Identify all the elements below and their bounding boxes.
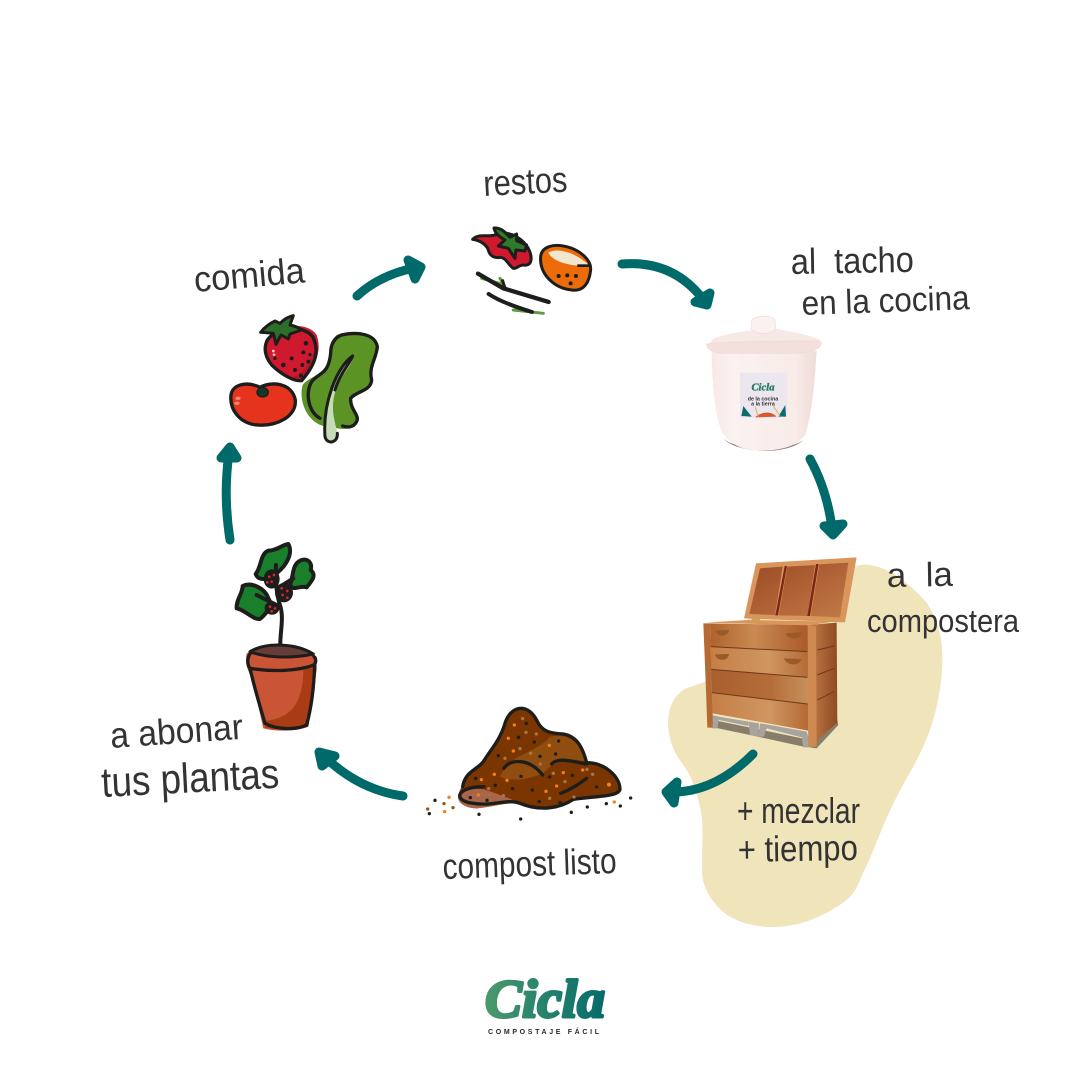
strawberry [261, 316, 319, 382]
arrow: compost to maceta [319, 752, 403, 796]
bin label: a la tierra [751, 401, 775, 407]
icon: restos (scraps) [473, 228, 591, 313]
pot [246, 645, 317, 731]
icon: comida (strawberry, tomato, leaf) [231, 316, 377, 442]
vegetable stalks [478, 274, 549, 313]
label: a abonar: a abonar [109, 706, 244, 756]
arrow: tacho to compostera [810, 459, 843, 535]
tomato [231, 384, 295, 425]
logo: Cicla: COMPOSTAJE FÁCIL [488, 1027, 600, 1036]
icon: wooden compost bin [703, 557, 857, 748]
label: restos: restos [482, 159, 568, 204]
arrow: maceta to comida [221, 447, 237, 540]
arrow: compostera to compost [666, 754, 753, 803]
arrow: restos to tacho [622, 264, 710, 305]
logo: Cicla: Cicla [485, 969, 605, 1029]
bin body [703, 618, 838, 748]
label: tiempo: + tiempo [737, 827, 858, 870]
icon: potted plant [237, 544, 317, 731]
plant [237, 544, 314, 654]
label: a la: a la [886, 556, 953, 595]
label: compost listo: compost listo [442, 840, 617, 887]
background blob behind compost bin [668, 565, 942, 927]
arrow: comida to restos [357, 260, 421, 296]
bin label: de la cocina [748, 397, 778, 403]
label: mezclar: + mezclar [737, 790, 860, 831]
label: al tacho: al tacho [790, 239, 914, 282]
label: en la cocina: en la cocina [801, 279, 970, 323]
bin label [740, 373, 787, 418]
strawberry scrap [473, 228, 531, 268]
label: tus plantas: tus plantas [100, 750, 280, 806]
icon: compost pile [426, 708, 632, 821]
bin label: Cicla [751, 383, 775, 394]
leaf [302, 332, 377, 442]
icon: kitchen bin [707, 316, 821, 451]
open lid [744, 557, 857, 622]
coconut shell [541, 245, 591, 290]
label: compostera: compostera [867, 603, 1019, 639]
label: comida: comida [192, 249, 307, 300]
